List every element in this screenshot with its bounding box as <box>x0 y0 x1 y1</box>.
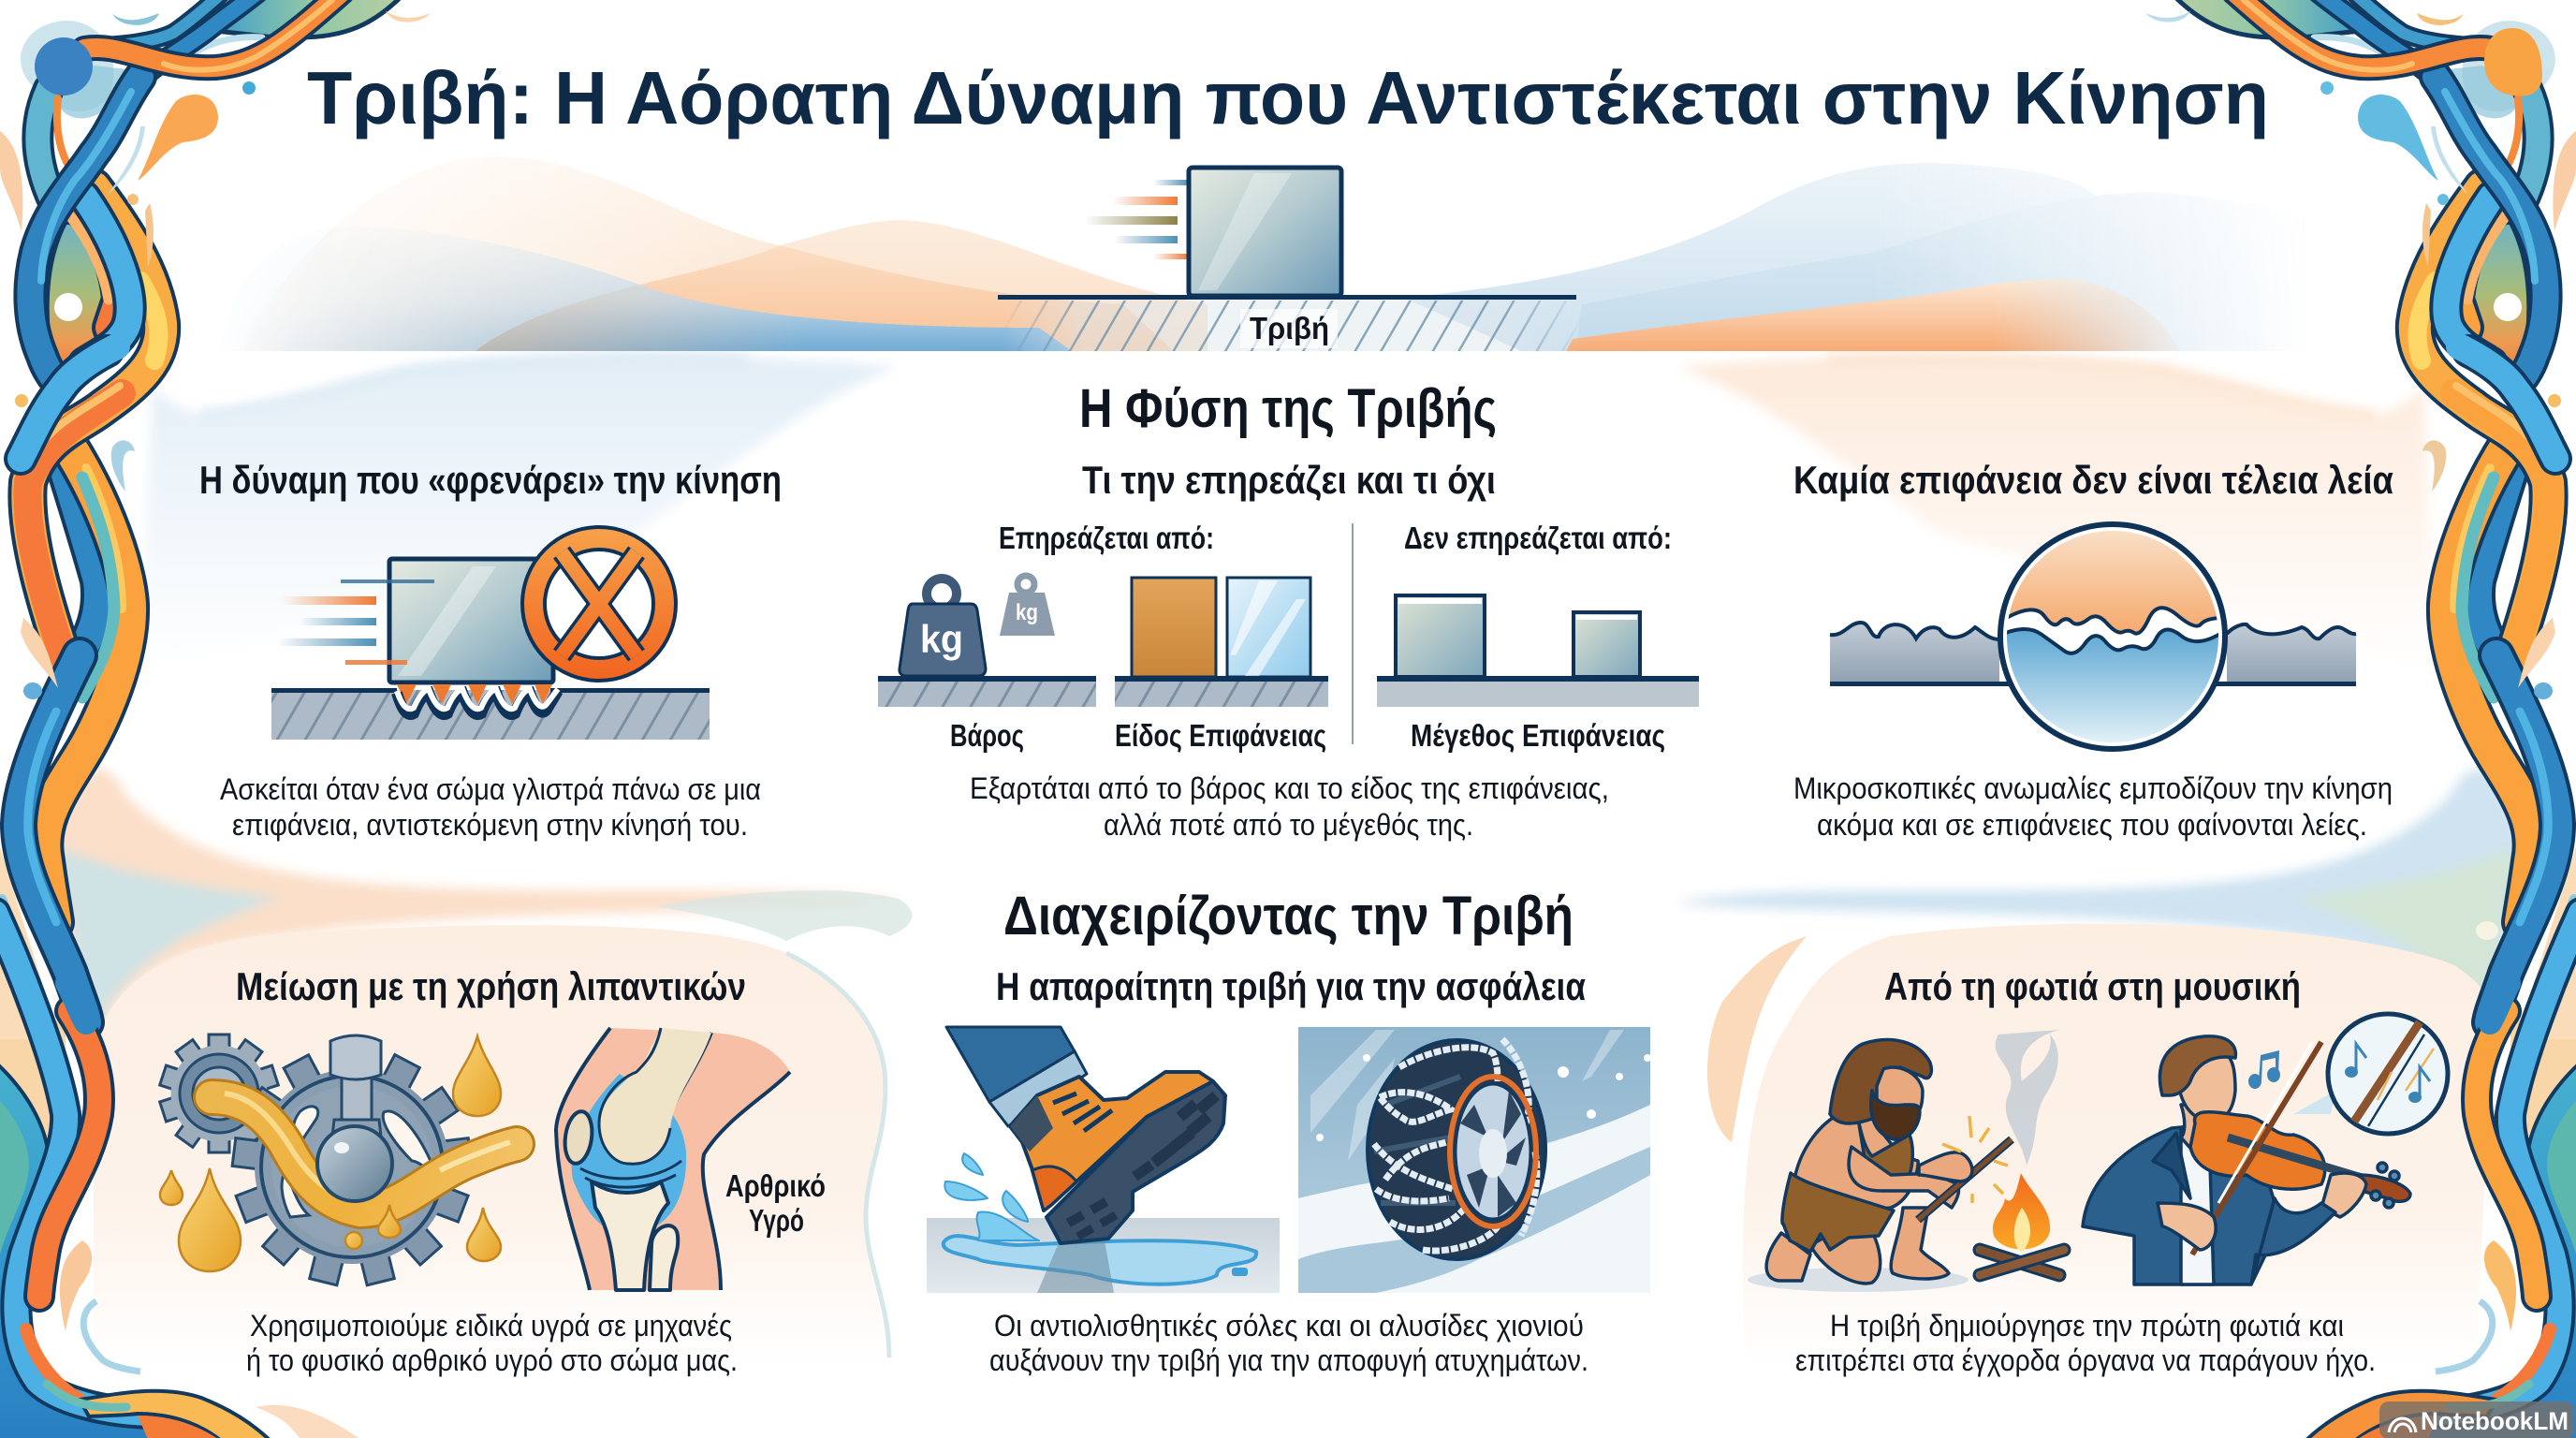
badge: NotebookLM: NotebookLM <box>2421 1407 2569 1435</box>
hero illustration: sliding block: Τριβή <box>1250 311 1329 345</box>
panel: braking force <box>199 458 782 842</box>
description line 2: επιφάνεια, αντιστεκόμενη στην κίνησή του. <box>232 808 748 842</box>
illustration: tyre with snow chains <box>1298 1027 1651 1293</box>
illustration: violinist <box>2083 1036 2410 1284</box>
illustration: magnified surface <box>1830 524 2356 749</box>
illustration: gears and oil <box>160 1034 517 1285</box>
panel edge: teal accent <box>786 953 889 1357</box>
subheading: affected by: Επηρεάζεται από: <box>999 521 1214 555</box>
callout: magnified bow on strings <box>2293 1014 2448 1134</box>
description line 2: ακόμα και σε επιφάνειες που φαίνονται λείες. <box>1817 808 2367 842</box>
description line 2: ή το φυσικό αρθρικό υγρό στο σώμα μας. <box>246 1343 738 1377</box>
decorative banner waves <box>251 156 2254 351</box>
illustration: knee joint <box>556 1028 790 1290</box>
panel: safety <box>927 964 1651 1377</box>
section heading: nature of friction: Η Φύση της Τριβής <box>1079 378 1497 439</box>
illustration: contact size <box>1377 595 1699 707</box>
description: no surface is smooth: Μικροσκοπικές ανωμαλίες εμποδίζουν την κίνηση <box>1793 771 2393 805</box>
panel: what affects friction <box>878 458 1699 842</box>
badge: NotebookLM <box>2379 1401 2574 1438</box>
panel: lubricants <box>160 964 826 1377</box>
illustration: caveman making fire <box>1748 1040 2012 1292</box>
heading: fire and music: Από τη φωτιά στη μουσική <box>1884 964 2301 1008</box>
label: surface size: Μέγεθος Επιφάνειας <box>1411 718 1665 753</box>
illustration: surface types <box>1115 578 1328 707</box>
description: fire and music: Η τριβή δημιούργησε την πρώτη φωτιά και <box>1830 1309 2344 1343</box>
label: weight: Βάρος <box>950 718 1024 753</box>
panel accent: teal tail <box>655 890 912 941</box>
heading: safety: Η απαραίτητη τριβή για την ασφάλεια <box>996 964 1586 1008</box>
divider <box>1352 523 1354 744</box>
icon: sparks <box>1942 1116 2008 1203</box>
heading: what affects it: Τι την επηρεάζει και τι όχι <box>1082 458 1496 502</box>
ornament: right ribbon border <box>2174 0 2576 1438</box>
subheading: not affected by: Δεν επηρεάζεται από: <box>1404 521 1672 555</box>
section heading: managing friction: Διαχειρίζοντας την Τριβή <box>1003 886 1573 946</box>
panel background: lubricants <box>94 925 889 1438</box>
illustration: boot on wet floor <box>927 1027 1280 1293</box>
ornament: left ribbon border <box>0 0 402 1438</box>
icon: campfire <box>1980 1030 2064 1275</box>
icon: music note <box>2248 1050 2280 1089</box>
background tints <box>51 357 2525 1049</box>
description: lubricants: Χρησιμοποιούμε ειδικά υγρά σε μηχανές <box>250 1309 732 1343</box>
illustration: weights: kg <box>1016 600 1038 625</box>
heading: lubricants: Μείωση με τη χρήση λιπαντικών <box>236 964 746 1008</box>
panel background: fire and music <box>1743 924 2499 1438</box>
description line 2: αλλά ποτέ από το μέγεθός της. <box>1104 808 1473 842</box>
label: synovial fluid line 2: Υγρό <box>749 1203 804 1238</box>
illustration: block stopped on rough ground <box>271 527 710 740</box>
description: what affects it: Εξαρτάται από το βάρος και το είδος της επιφάνειας, <box>970 771 1609 805</box>
illustration: weights: kg <box>920 617 963 661</box>
heading: braking force: Η δύναμη που «φρενάρει» την κίνηση <box>199 458 782 502</box>
description: safety: Οι αντιολισθητικές σόλες και οι αλυσίδες χιονιού <box>994 1309 1584 1343</box>
hero illustration: sliding block <box>998 168 1582 351</box>
title: Τριβή: Η Αόρατη Δύναμη που Αντιστέκεται στην Κίνηση <box>307 56 2269 139</box>
illustration: weights <box>878 576 1096 707</box>
description line 2: αυξάνουν την τριβή για την αποφυγή ατυχημάτων. <box>989 1343 1588 1377</box>
label: surface type: Είδος Επιφάνειας <box>1115 718 1326 753</box>
label: synovial fluid: Αρθρικό <box>725 1168 826 1203</box>
description line 2: επιτρέπει στα έγχορδα όργανα να παράγουν ήχο. <box>1795 1343 2376 1377</box>
panel edge: peach accent <box>1707 936 1807 1142</box>
description: braking force: Ασκείται όταν ένα σώμα γλιστρά πάνω σε μια <box>220 772 761 806</box>
panel: no surface is smooth <box>1793 458 2393 842</box>
heading: no surface is smooth: Καμία επιφάνεια δεν είναι τέλεια λεία <box>1793 458 2393 502</box>
panel: fire and music <box>1748 964 2448 1377</box>
